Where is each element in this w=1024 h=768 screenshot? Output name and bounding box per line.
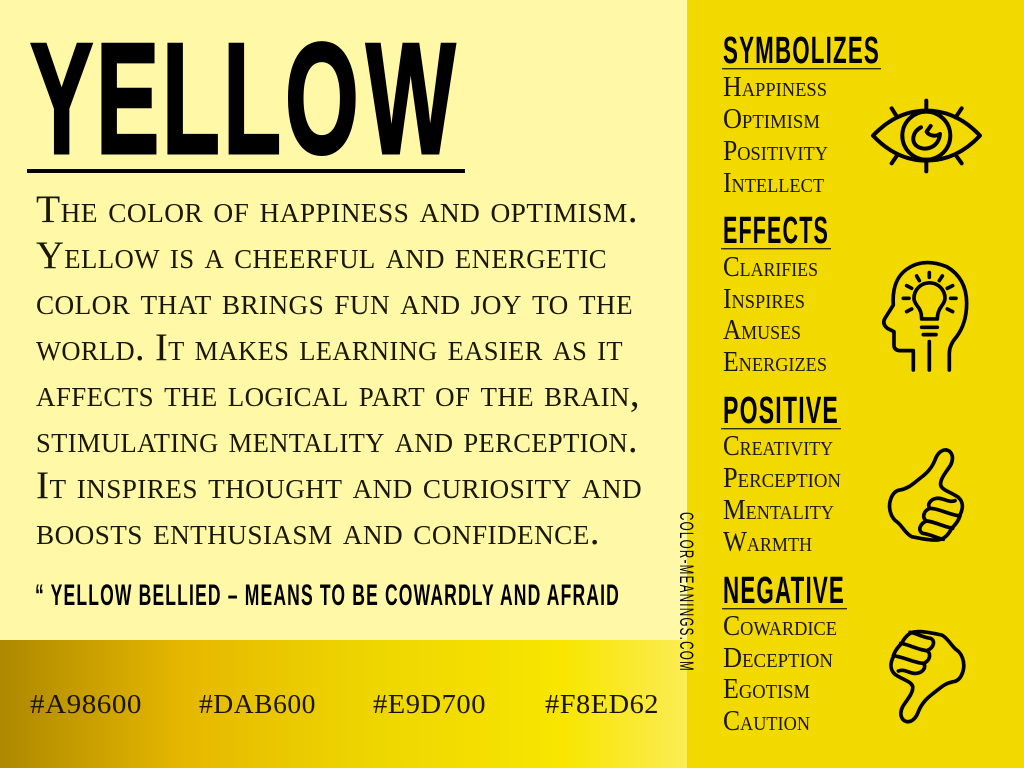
panel: right background	[687, 0, 1024, 768]
panel: colour gradient swatches	[0, 640, 687, 768]
list: negative: Cowardice	[723, 611, 837, 642]
icon: head with light bulb	[884, 263, 967, 370]
list: positive: Perception	[723, 463, 841, 494]
panel: positive	[721, 390, 962, 558]
heading: symbolizes: SYMBOLIZES	[723, 30, 880, 72]
icon: eye	[873, 101, 980, 171]
text block: description: Yellow is a cheerful and energetic	[36, 234, 607, 277]
list: symbolizes	[723, 72, 828, 199]
list: negative: Egotism	[723, 674, 810, 705]
hex code: #E9D700	[373, 689, 486, 719]
list: negative: Caution	[723, 706, 810, 737]
text block: description	[36, 188, 642, 553]
hex code: #DAB600	[199, 689, 316, 719]
text block: description: color that brings fun and joy to the	[36, 280, 633, 323]
list: effects: Inspires	[723, 284, 805, 315]
text block: description: affects the logical part of the brain,	[36, 372, 640, 415]
heading: positive: POSITIVE	[723, 390, 839, 432]
list: effects: Energizes	[723, 347, 827, 378]
icon: thumbs up	[890, 450, 962, 540]
list: effects	[723, 252, 827, 378]
panel: negative	[722, 570, 964, 737]
list: negative: Deception	[723, 643, 833, 674]
list: effects: Amuses	[723, 315, 801, 346]
text block: description: world. It makes learning easier as it	[36, 326, 623, 369]
text block: description: stimulating mentality and perception.	[36, 418, 638, 461]
list: positive: Creativity	[723, 431, 833, 462]
list: effects: Clarifies	[723, 252, 818, 283]
hex code: #A98600	[30, 689, 142, 719]
text block: description: It inspires thought and curiosity and	[36, 464, 642, 507]
title: YELLOW	[30, 10, 455, 187]
list: symbolizes: Positivity	[723, 136, 828, 167]
list: negative	[723, 611, 837, 737]
panel: effects	[721, 210, 967, 378]
vertical site credit: COLOR-MEANINGS.COM	[675, 512, 696, 672]
list: positive: Mentality	[723, 495, 834, 526]
icon: thumbs down	[891, 632, 964, 722]
text block: description: The color of happiness and optimism.	[36, 188, 638, 231]
heading: negative: NEGATIVE	[723, 570, 845, 612]
title underline	[27, 169, 465, 173]
quote: “ YELLOW BELLIED – MEANS TO BE COWARDLY AND AFRAID	[35, 579, 620, 612]
list: symbolizes: Happiness	[723, 72, 827, 103]
hex code: #F8ED62	[545, 689, 659, 719]
list: symbolizes: Intellect	[723, 168, 824, 199]
list: symbolizes: Optimism	[723, 104, 820, 135]
heading: effects: EFFECTS	[723, 210, 829, 252]
text block: description: boosts enthusiasm and confidence.	[36, 510, 600, 553]
list: positive: Warmth	[723, 527, 812, 558]
list: positive	[723, 431, 841, 558]
panel: symbolizes	[722, 30, 980, 199]
panel: left background	[0, 0, 687, 640]
